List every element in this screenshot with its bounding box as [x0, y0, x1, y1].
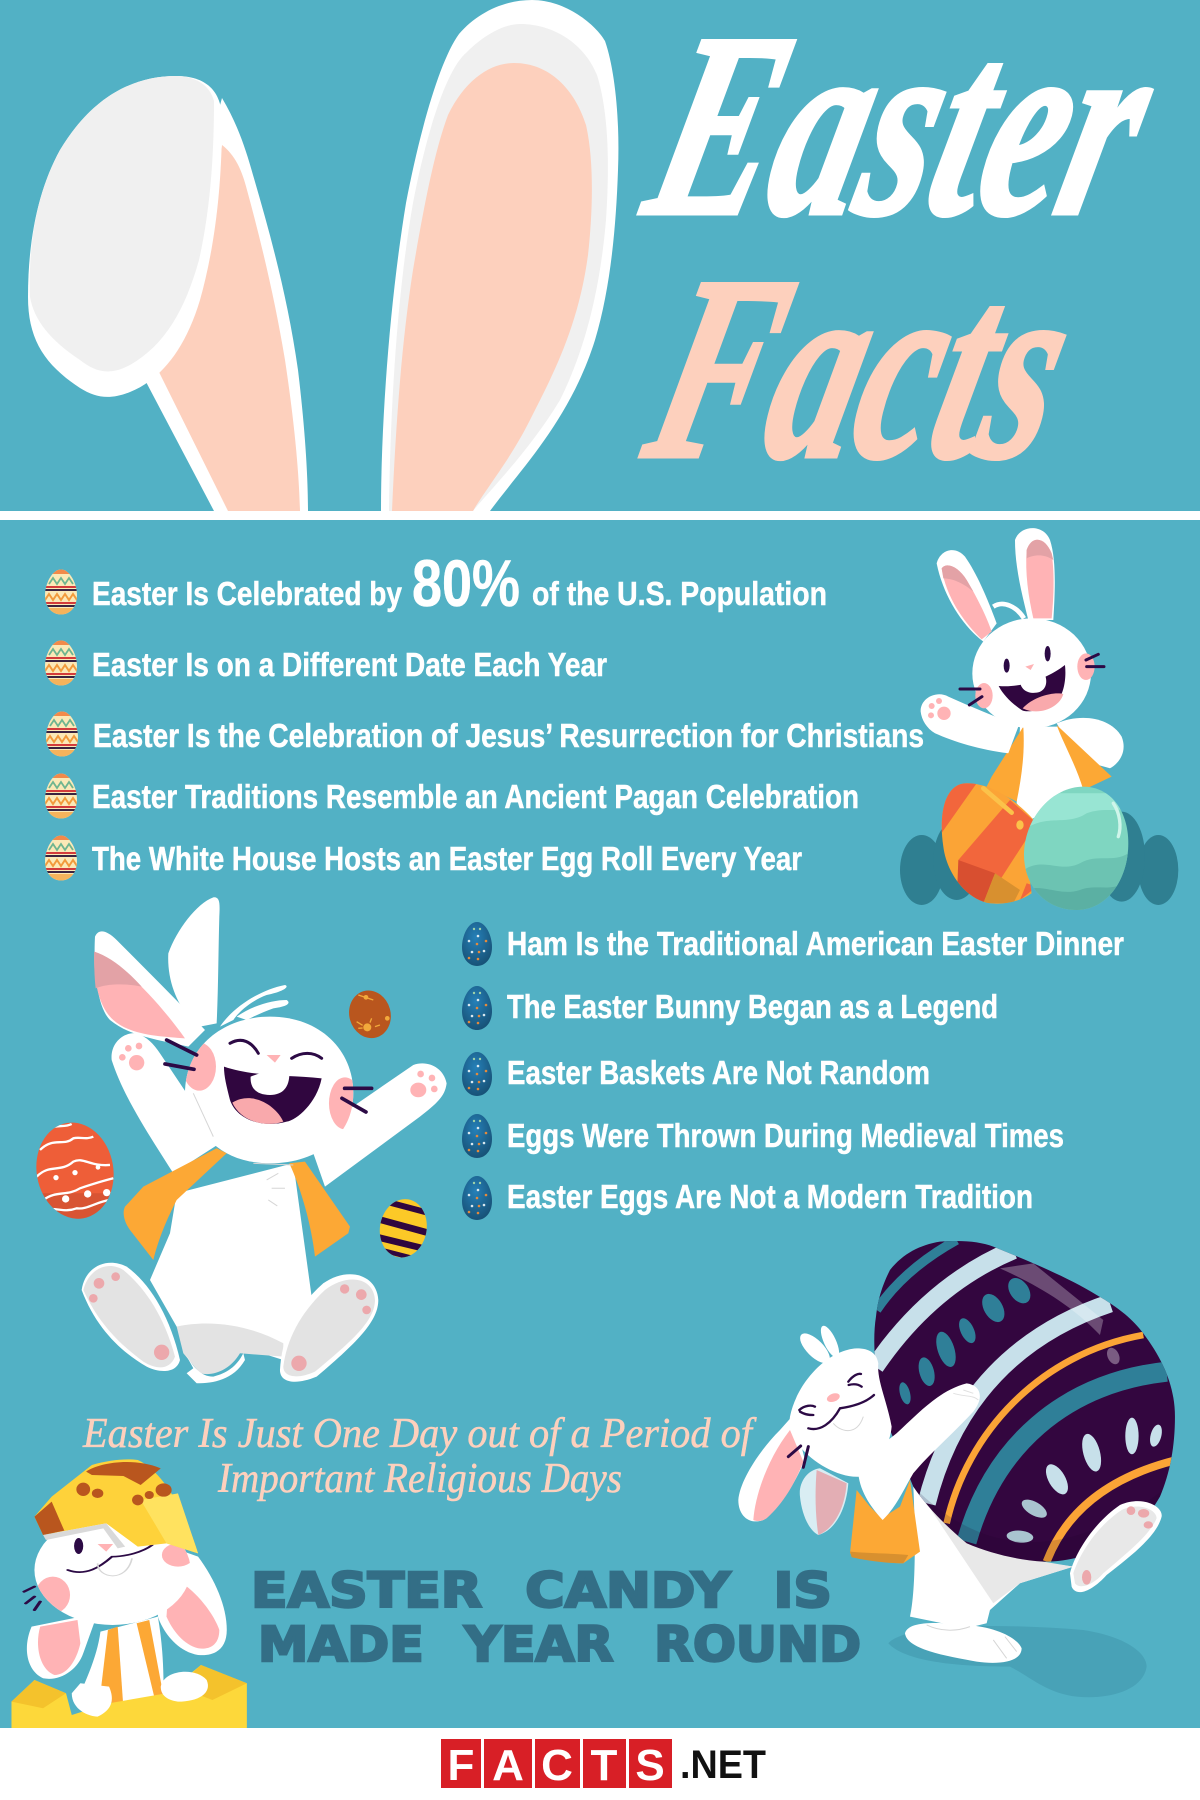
fact 8	[462, 1052, 930, 1096]
fact 7: The Easter Bunny Began as a Legend	[507, 988, 998, 1025]
fact 1	[45, 546, 827, 620]
callout: religious days: Easter Is Just One Day out of a Period of	[82, 1411, 757, 1457]
fact 1: of the U.S. Population	[532, 575, 827, 612]
callout: religious days	[82, 1411, 757, 1502]
illustration: waving bunny with eggs	[900, 528, 1178, 910]
divider band	[0, 511, 1200, 520]
callout: religious days: Important Religious Days	[217, 1456, 622, 1502]
illustration: bunny in eggshell	[11, 1459, 247, 1728]
fact list: middle	[462, 922, 1124, 1220]
logo: Facts.net: T	[591, 1741, 618, 1790]
callout: candy	[251, 1563, 861, 1673]
fact 7	[462, 986, 998, 1030]
logo: Facts.net: C	[541, 1741, 573, 1790]
logo: Facts.net: .NET	[680, 1743, 766, 1787]
footer	[0, 1728, 1200, 1800]
fact 9: Eggs Were Thrown During Medieval Times	[507, 1117, 1064, 1154]
illustration: bunny pushing giant egg	[738, 1240, 1177, 1697]
callout: candy: MADE YEAR ROUND	[258, 1617, 861, 1673]
fact 2	[45, 640, 607, 686]
fact 10	[462, 1176, 1033, 1220]
fact 1: Easter Is Celebrated by	[92, 575, 403, 612]
fact 5: The White House Hosts an Easter Egg Roll Every Year	[92, 840, 802, 877]
logo: Facts.net: A	[492, 1741, 524, 1790]
fact 1: 80%	[412, 546, 520, 620]
fact 3	[46, 711, 924, 757]
illustration: juggling bunny	[29, 897, 447, 1383]
callout: candy: EASTER CANDY IS	[251, 1563, 832, 1619]
logo: Facts.net: F	[448, 1741, 474, 1790]
fact 5	[45, 835, 802, 881]
left bunny ear	[28, 76, 308, 511]
fact 4: Easter Traditions Resemble an Ancient Pagan Celebration	[92, 778, 859, 815]
fact 4	[45, 773, 859, 819]
fact list: top	[45, 546, 924, 881]
logo: Facts.net: S	[635, 1741, 665, 1790]
logo: Facts.net	[441, 1739, 766, 1790]
fact 10: Easter Eggs Are Not a Modern Tradition	[507, 1178, 1033, 1215]
fact 3: Easter Is the Celebration of Jesus’ Resurrection for Christians	[93, 717, 924, 754]
right bunny ear	[381, 0, 618, 511]
fact 9	[462, 1114, 1064, 1158]
fact 2: Easter Is on a Different Date Each Year	[92, 646, 607, 683]
fact 8: Easter Baskets Are Not Random	[507, 1054, 930, 1091]
